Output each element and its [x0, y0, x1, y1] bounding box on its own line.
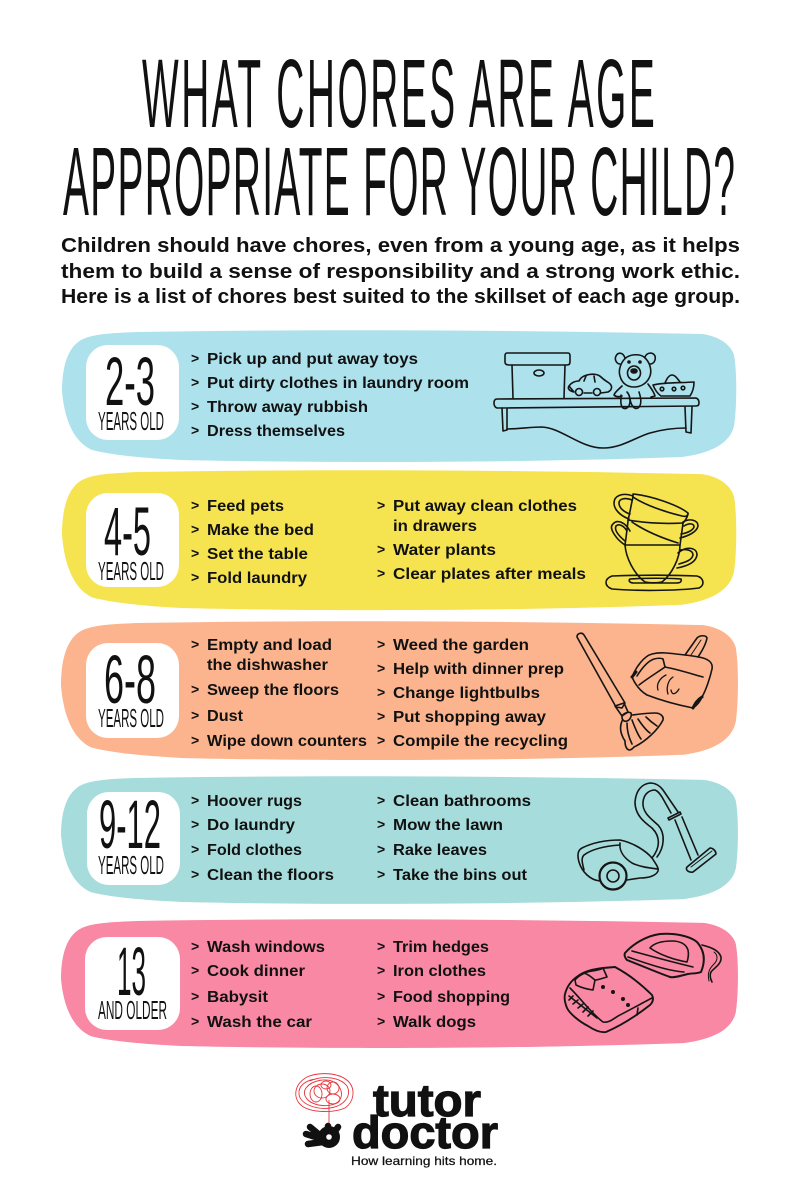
icon: iron and folded shirt [565, 934, 721, 1032]
chore list: 9-12 right [377, 792, 531, 884]
chore list: 6-8 left: > [191, 732, 199, 748]
chore list: 9-12 right: Take the bins out [393, 867, 527, 884]
chore list: 13 right: > [377, 988, 385, 1004]
icon: shelf with toys [494, 353, 699, 448]
chore list: 9-12 right: Mow the lawn [393, 817, 503, 834]
chore list: 6-8 right: Help with dinner prep [393, 661, 564, 678]
chore list: 6-8 left: Sweep the floors [207, 682, 339, 699]
chore list: 6-8 right: > [377, 660, 385, 676]
age badge: 6-8: YEARS OLD [98, 703, 164, 733]
chore list: 4-5 right: > [377, 497, 385, 513]
chore list: 6-8 right: Weed the garden [393, 637, 529, 654]
chore list: 2-3: Pick up and put away toys [207, 351, 418, 368]
chore list: 4-5 right: > [377, 565, 385, 581]
chore list: 13 right: Iron clothes [393, 963, 486, 980]
intro text: Children should have chores, even from a young age, as it helps [61, 234, 740, 257]
age badge: 9-12 [87, 786, 180, 885]
intro text: Here is a list of chores best suited to the skillset of each age group. [61, 285, 740, 308]
chore list: 6-8 left [191, 636, 367, 750]
chore list: 2-3: Dress themselves [207, 423, 345, 440]
chore list: 9-12 left: Do laundry [207, 817, 295, 834]
chore list: 6-8 left: > [191, 707, 199, 723]
chore list: 9-12 right: Rake leaves [393, 842, 487, 859]
age badge: 2-3: 2-3 [105, 343, 155, 420]
chore list: 6-8 right: > [377, 684, 385, 700]
chore list: 4-5 right: > [377, 541, 385, 557]
chore list: 13 left: Wash the car [207, 1014, 312, 1031]
chore list: 4-5 left: > [191, 545, 199, 561]
title: APPROPRIATE FOR YOUR CHILD? [63, 127, 735, 236]
chore list: 13 right: > [377, 962, 385, 978]
chore list: 13 left: > [191, 962, 199, 978]
chore list: 6-8 right: Put shopping away [393, 709, 546, 726]
chore list: 13 right: Trim hedges [393, 939, 489, 956]
chore list: 6-8 left: the dishwasher [207, 657, 328, 674]
chore list: 9-12 right: > [377, 792, 385, 808]
chore list: 6-8 left: Wipe down counters [207, 733, 367, 750]
icon: stacked cups [606, 494, 703, 590]
title: WHAT CHORES ARE AGE [142, 39, 655, 148]
chore list: 4-5 left: > [191, 569, 199, 585]
chore list: 9-12 left: > [191, 816, 199, 832]
intro text [61, 234, 740, 308]
chore list: 4-5 left [191, 497, 314, 587]
chore list: 6-8 right: Compile the recycling [393, 733, 568, 750]
panel: 2-3 years old [62, 330, 736, 462]
logo tagline: How learning hits home. [351, 1154, 497, 1168]
chore list: 13 left: Wash windows [207, 939, 325, 956]
age badge: 6-8 [86, 641, 179, 738]
age badge: 13 and older: 13 [117, 933, 146, 1010]
icon: vacuum cleaner [578, 783, 716, 890]
chore list: 2-3: > [191, 374, 199, 390]
icon: broom and dustpan [577, 633, 712, 750]
age badge: 2-3 [86, 343, 179, 440]
logo wordmark: tutor [373, 1075, 481, 1126]
chore list: 9-12 left: Fold clothes [207, 842, 302, 859]
title [63, 39, 735, 236]
chore list: 6-8 left: Dust [207, 708, 243, 725]
chore list: 13 left: > [191, 1013, 199, 1029]
chore list: 13 right: Food shopping [393, 989, 510, 1006]
chore list: 6-8 left: Empty and load [207, 637, 332, 654]
chore list: 2-3: > [191, 422, 199, 438]
chore list: 9-12 left: Hoover rugs [207, 793, 302, 810]
chore list: 4-5 left: Feed pets [207, 498, 284, 515]
panel: 9-12 years old [61, 776, 738, 904]
chore list: 6-8 right: > [377, 708, 385, 724]
intro text: them to build a sense of responsibility and a strong work ethic. [61, 260, 740, 283]
chore list: 4-5 left: > [191, 521, 199, 537]
chore list: 4-5 right: in drawers [393, 518, 477, 535]
logo: tutor doctor [296, 1074, 498, 1168]
chore list: 6-8 right: > [377, 636, 385, 652]
chore list: 9-12 left [191, 792, 334, 884]
logo wordmark: doctor [352, 1107, 498, 1158]
age badge: 4-5 [86, 493, 179, 587]
chore list: 13 left: > [191, 938, 199, 954]
chore list: 4-5 right: Put away clean clothes [393, 498, 577, 515]
chore list: 2-3 [191, 350, 469, 440]
logo icon: scribble and hand [296, 1074, 353, 1148]
chore list: 4-5 left: Fold laundry [207, 570, 307, 587]
chore list: 13 right: Walk dogs [393, 1014, 476, 1031]
age badge: 4-5: YEARS OLD [98, 556, 164, 586]
chore list: 13 left: Cook dinner [207, 963, 305, 980]
panel: 13 and older [61, 919, 738, 1048]
age badge: 9-12: YEARS OLD [98, 850, 164, 880]
logo wordmark [352, 1075, 498, 1158]
chore list: 13 left: > [191, 988, 199, 1004]
chore list: 9-12 right: > [377, 841, 385, 857]
chore list: 13 right [377, 938, 510, 1031]
chore list: 4-5 left: > [191, 497, 199, 513]
panel: 6-8 years old [61, 621, 738, 760]
age badge: 2-3: YEARS OLD [98, 406, 164, 436]
chore list: 2-3: Throw away rubbish [207, 399, 368, 416]
chore list: 4-5 left: Make the bed [207, 522, 314, 539]
chore list: 13 right: > [377, 1013, 385, 1029]
chore list: 13 left: Babysit [207, 989, 268, 1006]
chore list: 6-8 left: > [191, 681, 199, 697]
chore list: 2-3: Put dirty clothes in laundry room [207, 375, 469, 392]
chore list: 9-12 left: > [191, 841, 199, 857]
age badge: 4-5: 4-5 [104, 493, 151, 570]
age badge: 6-8: 6-8 [104, 641, 156, 718]
chore list: 6-8 right [377, 636, 568, 750]
chore list: 9-12 left: Clean the floors [207, 867, 334, 884]
chore list: 6-8 left: > [191, 636, 199, 652]
chore list: 9-12 left: > [191, 792, 199, 808]
chore list: 4-5 right [377, 497, 586, 583]
chore list: 4-5 right: Clear plates after meals [393, 566, 586, 583]
chore list: 6-8 right: Change lightbulbs [393, 685, 540, 702]
chore list: 6-8 right: > [377, 732, 385, 748]
age badge: 13 and older: AND OLDER [98, 995, 167, 1025]
chore list: 2-3: > [191, 398, 199, 414]
chore list: 9-12 left: > [191, 866, 199, 882]
chore list: 13 right: > [377, 938, 385, 954]
chore list: 13 left [191, 938, 325, 1031]
panel: 4-5 years old [62, 470, 736, 610]
chore list: 4-5 right: Water plants [393, 542, 496, 559]
chore list: 2-3: > [191, 350, 199, 366]
age badge: 13 and older [85, 933, 180, 1030]
chore list: 4-5 left: Set the table [207, 546, 308, 563]
chore list: 9-12 right: > [377, 816, 385, 832]
chore list: 9-12 right: > [377, 866, 385, 882]
chore list: 9-12 right: Clean bathrooms [393, 793, 531, 810]
age badge: 9-12: 9-12 [99, 786, 161, 863]
